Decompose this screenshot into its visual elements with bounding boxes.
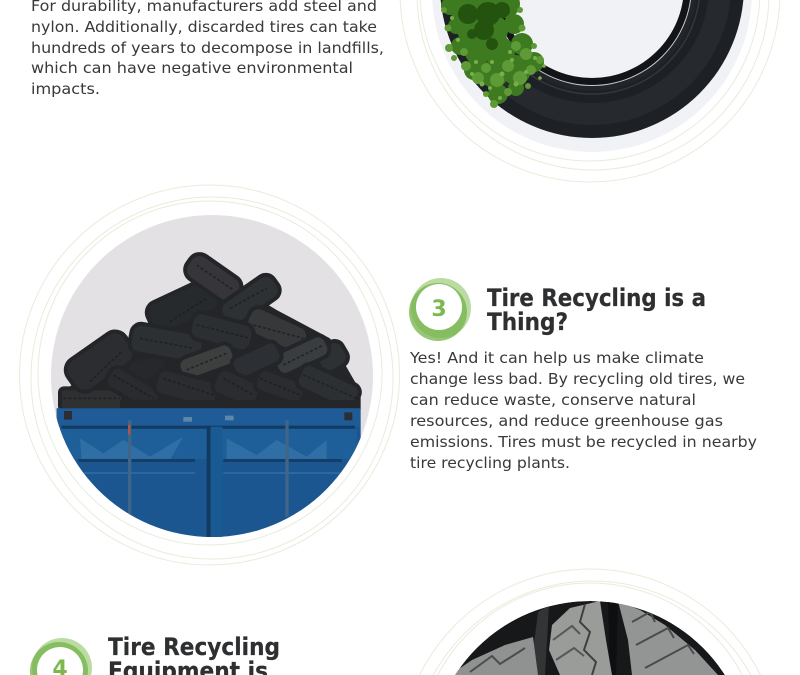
text block: section 3: emissions. Tires must be recycled in nearby — [410, 433, 757, 451]
text block: tire materials: nylon. Additionally, discarded tires can take — [31, 18, 377, 36]
decorative rings: top photo — [400, 0, 780, 182]
tread lines — [90, 352, 122, 382]
photo: stacked tires on blue container — [51, 215, 373, 537]
badge: number 3 — [409, 278, 471, 341]
text block: section 3: tire recycling plants. — [410, 454, 570, 472]
text block: tire materials: which can have negative environmental — [31, 59, 353, 77]
badge: number 4 — [30, 638, 92, 675]
photo: tire with tree — [432, 0, 752, 152]
decorative rings: bottom photo — [400, 569, 780, 675]
heading: section 4: Tire Recycling — [108, 633, 280, 661]
tire pile — [60, 250, 363, 413]
text block: section 3: resources, and reduce greenhouse gas — [410, 412, 723, 430]
text block: section 3: change less bad. By recycling old tires, we — [410, 370, 745, 388]
heading: section 3: Tire Recycling is a — [487, 284, 706, 312]
heading: section 3 — [487, 284, 706, 336]
text block: section 3: can reduce waste, conserve natural — [410, 391, 696, 409]
photo: tire tread close-up — [455, 601, 725, 675]
badge: number 3: 3 — [431, 297, 447, 322]
heading: section 4 — [108, 633, 280, 675]
decorative rings: middle photo — [20, 185, 400, 565]
tree foliage — [441, 0, 546, 108]
heading: section 3: Thing? — [487, 308, 568, 336]
tire body — [440, 0, 744, 138]
text block: section 3: Yes! And it can help us make climate — [409, 349, 704, 367]
text block: tire materials: hundreds of years to decompose in landfills, — [31, 39, 384, 57]
blue container — [57, 408, 361, 542]
text block: section 3 — [409, 349, 757, 472]
text block: tire materials: impacts. — [31, 80, 100, 98]
text block: tire materials — [31, 0, 384, 98]
